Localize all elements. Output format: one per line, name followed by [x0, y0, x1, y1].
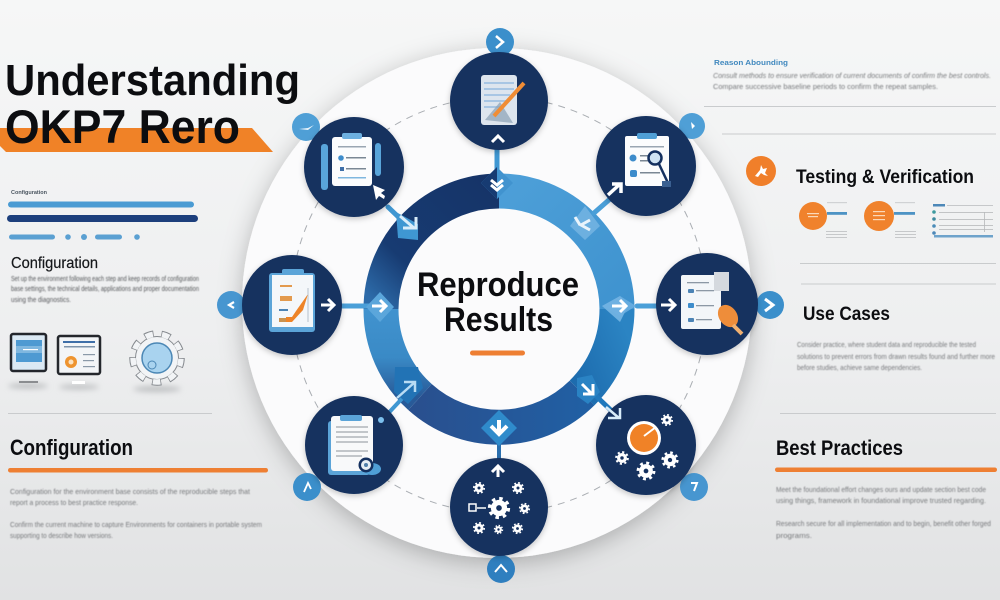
- step: bottom left document and seal: [293, 396, 403, 501]
- connectors: [338, 148, 660, 460]
- step: top document and pencil: [450, 28, 548, 150]
- panel: best practices: Best Practices: [776, 437, 903, 460]
- step: right document and brush: [656, 253, 784, 355]
- center label: [417, 266, 579, 356]
- ring node: left: [366, 292, 394, 322]
- configuration description: using the diagnostics.: [11, 297, 71, 304]
- configuration notes text: report a process to best practice response.: [10, 498, 138, 507]
- badge: [293, 473, 321, 501]
- configuration description: base settings, the technical details, applications and proper documentation: [11, 286, 199, 293]
- mini diagram one: [799, 202, 847, 238]
- mini diagram two: [864, 201, 916, 238]
- panel: configuration notes: Configuration: [10, 435, 133, 460]
- configuration description: Set up the environment following each step and keep records of configuration: [11, 276, 199, 283]
- icon: monitor one: [8, 334, 48, 388]
- badge: [679, 113, 705, 139]
- panel: intro text: Consult methods to ensure verification of current documents of confirm the best controls.: [713, 71, 991, 80]
- progress bars: [7, 202, 198, 240]
- ring node: right: [602, 296, 636, 322]
- panel: intro text: [713, 58, 991, 91]
- step: bottom right gears and dial: [596, 395, 708, 501]
- ring node: bottom left: [394, 367, 423, 404]
- step: top left clipboard: [292, 113, 404, 217]
- center label: Reproduce: [417, 266, 579, 304]
- configuration notes text: Configuration for the environment base consists of the reproducible steps that: [10, 487, 251, 496]
- best practices text: [776, 485, 991, 540]
- step: bottom gears: [450, 458, 548, 583]
- badge: [217, 291, 245, 319]
- icon: orange tools badge: [746, 156, 776, 186]
- configuration notes text: Confirm the current machine to capture Environments for containers in portable system: [10, 520, 262, 529]
- panel: testing and verification: Testing & Verification: [796, 167, 974, 188]
- best practices text: programs.: [776, 531, 812, 540]
- badge: [292, 113, 320, 141]
- panel: intro text: Compare successive baseline periods to confirm the repeat samples.: [713, 82, 938, 91]
- panel: configuration overview: [7, 190, 199, 392]
- ring node: top right: [570, 206, 600, 240]
- configuration description: [11, 276, 199, 304]
- badge: [487, 555, 515, 583]
- panel: intro text: Reason Abounding: [714, 58, 788, 67]
- main circular diagram: [217, 28, 784, 583]
- orange rule: [8, 468, 268, 472]
- orange rule: [775, 468, 997, 472]
- ring node: top: [481, 167, 513, 199]
- use cases text: [797, 340, 995, 372]
- icon: monitor two: [58, 336, 100, 390]
- title: OKP7 Rero: [5, 100, 240, 153]
- orange title banner: [0, 128, 273, 152]
- ring node: bottom: [481, 410, 517, 446]
- panel: best practices: [775, 437, 997, 540]
- panel: use cases: Use Cases: [803, 304, 890, 325]
- central ring: [381, 191, 617, 427]
- panel: use cases: [797, 304, 995, 372]
- title: Understanding: [5, 56, 300, 105]
- white disc: [242, 48, 752, 558]
- panel: testing and verification: [746, 156, 993, 238]
- ring node: top left: [396, 212, 418, 240]
- badge: [680, 473, 708, 501]
- panel: configuration notes: [8, 435, 268, 540]
- configuration notes text: supporting to describe how versions.: [10, 531, 113, 540]
- use cases text: before studies, achieve same dependencies.: [797, 363, 922, 372]
- step: top right clipboard and magnifier: [596, 113, 705, 216]
- panel: configuration overview: Configuration: [11, 190, 48, 196]
- dashed orbit: [291, 97, 707, 513]
- title: [0, 56, 300, 153]
- configuration notes text: [10, 487, 262, 540]
- badge: [486, 28, 514, 56]
- best practices text: using things, framework in foundational improve trusted regarding.: [776, 496, 986, 505]
- center label: Results: [444, 301, 553, 339]
- icon: gear: [133, 334, 181, 392]
- ring node: bottom right: [577, 375, 600, 404]
- step: left clipboard and chart: [217, 255, 342, 355]
- mini table: [932, 204, 993, 238]
- badge: [756, 291, 784, 319]
- panel: configuration overview: Configuration: [11, 255, 98, 272]
